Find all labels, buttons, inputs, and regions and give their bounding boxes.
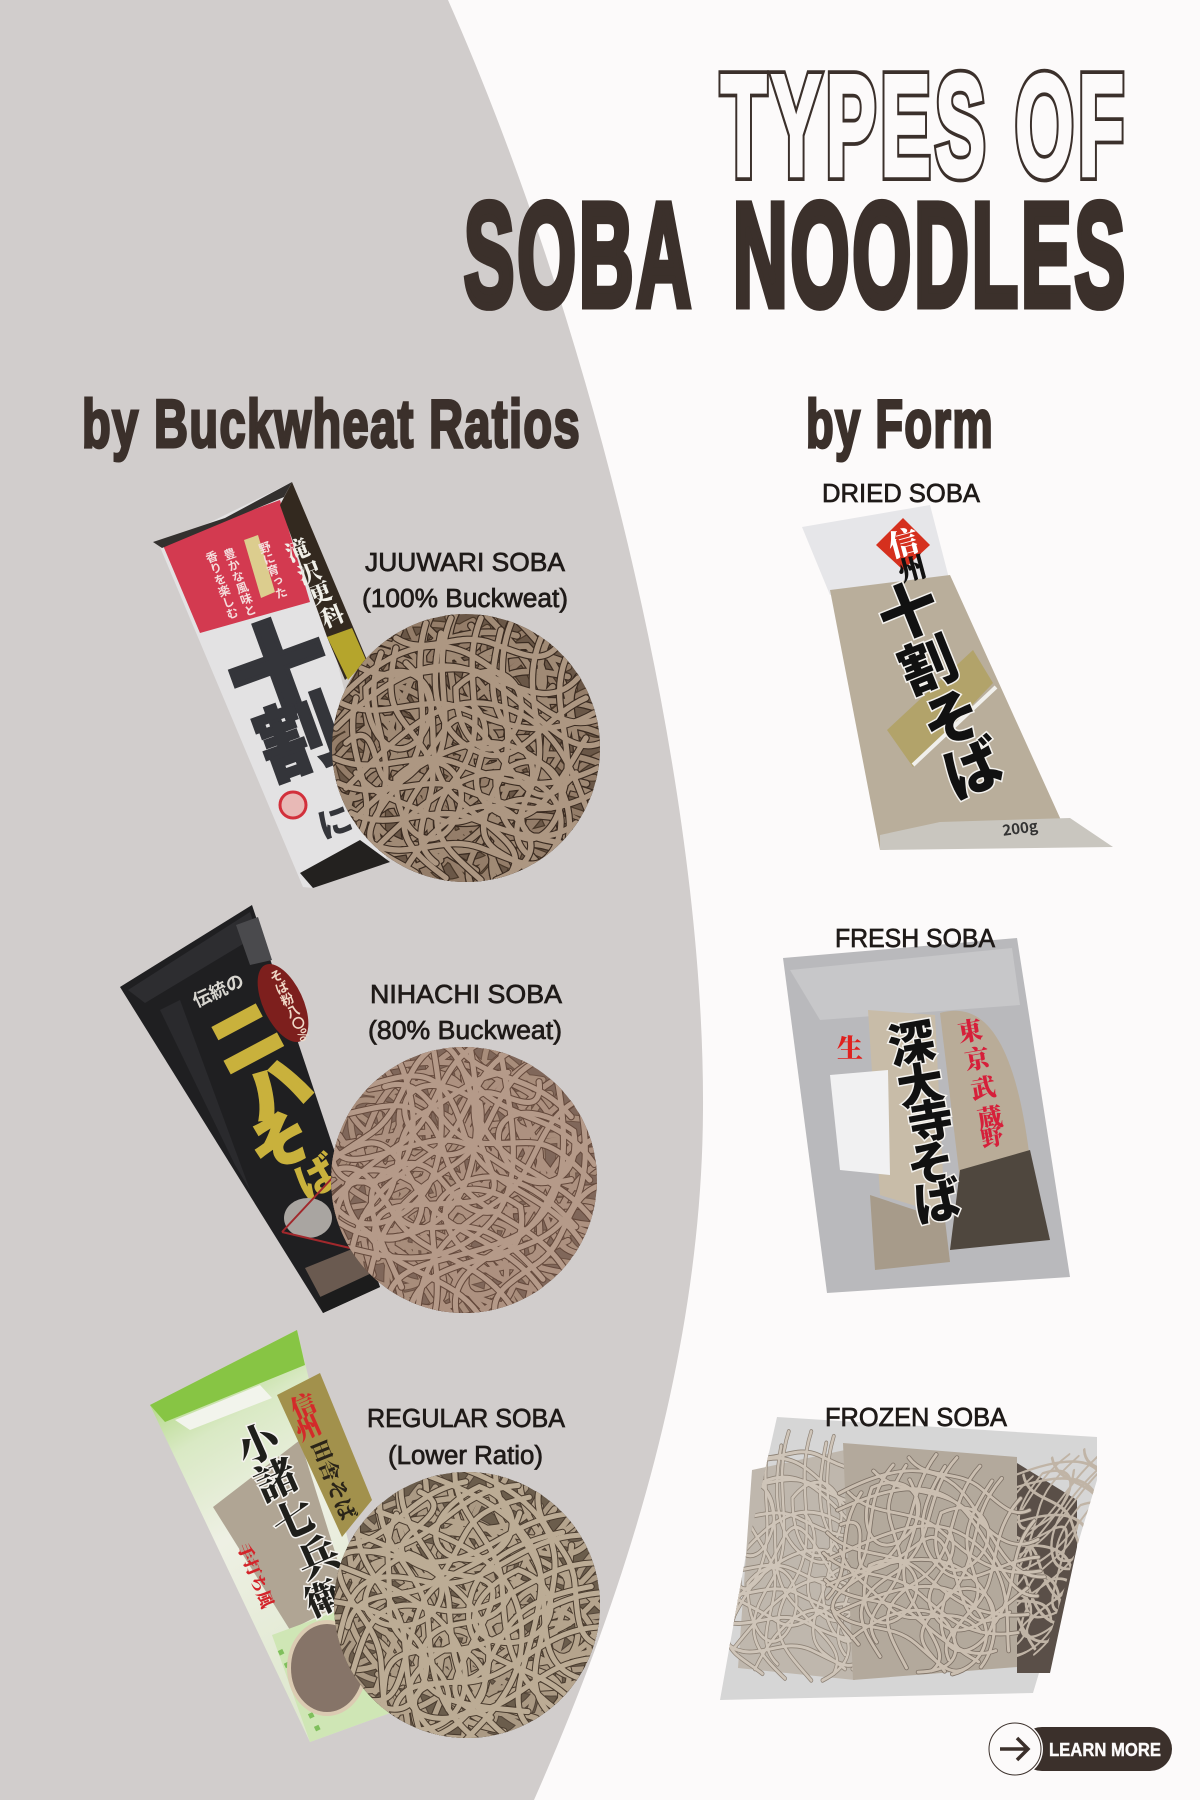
package: juuwari soba: 滝: [280, 529, 314, 569]
title line: soba noodles (solid): SOBA: [464, 174, 694, 338]
package: regular soba: 手打ち風: [233, 1539, 281, 1611]
package: regular soba: 兵: [286, 1518, 350, 1591]
package: dried soba: [802, 505, 1113, 850]
label: nihachi soba: (80% Buckweat): [368, 1017, 562, 1045]
package: fresh soba: 東: [955, 1010, 985, 1050]
package: dried soba: 割: [886, 614, 968, 710]
package: juuwari soba: 豊かな風味と: [219, 544, 260, 619]
package: regular soba: 州: [289, 1405, 327, 1449]
package: nihachi soba: そば粉八〇%: [265, 966, 315, 1045]
package: juuwari soba: 香りを楽しむ: [201, 547, 242, 622]
package: regular soba: 信: [284, 1383, 322, 1427]
label: regular soba: (Lower Ratio): [388, 1442, 543, 1470]
package: nihachi soba: 伝統の: [188, 967, 248, 1013]
package: regular soba: 衛: [295, 1566, 349, 1628]
package: frozen soba: [720, 1417, 1097, 1700]
package: regular soba: 諸: [244, 1442, 306, 1514]
package: fresh soba: 生: [837, 1028, 863, 1066]
package: juuwari soba: [153, 482, 390, 888]
package: juuwari soba: 更: [303, 572, 337, 612]
label: frozen soba: FROZEN SOBA: [825, 1404, 1007, 1432]
button: learn more: LEARN MORE: [1049, 1740, 1161, 1760]
package: fresh soba: 寺: [902, 1082, 958, 1154]
package: dried soba: 200g: [1001, 815, 1039, 841]
package: juuwari soba: 科: [315, 595, 349, 635]
package: fresh soba: 深: [882, 1002, 940, 1078]
package: dried soba: 州: [893, 545, 931, 591]
package: regular soba: [150, 1330, 390, 1742]
noodle circle: juuwari: [332, 614, 600, 882]
package: fresh soba: 蔵: [975, 1097, 1005, 1137]
package: juuwari soba: 沢: [292, 552, 326, 592]
noodle circle: regular: [334, 1472, 600, 1738]
package: nihachi soba: そ: [231, 1086, 325, 1190]
package: juuwari soba: 野に育った: [255, 538, 291, 601]
icon: arrow in circle: [987, 1721, 1043, 1777]
title: [464, 44, 1128, 338]
package: fresh soba: そ: [901, 1122, 959, 1198]
package: dried soba: 信: [883, 516, 923, 566]
package: regular soba: 田舎そば: [304, 1435, 364, 1525]
package: dried soba: ば: [929, 715, 1015, 815]
package: regular soba: 小: [226, 1404, 293, 1478]
package: nihachi soba: ば: [283, 1138, 349, 1212]
label: regular soba: [367, 1405, 565, 1470]
package: regular soba: 七: [262, 1482, 324, 1554]
package: fresh soba: 武: [968, 1067, 998, 1107]
label: regular soba: REGULAR SOBA: [367, 1405, 565, 1433]
label: juuwari soba: (100% Buckweat): [362, 585, 568, 613]
package: fresh soba: 大: [891, 1044, 949, 1120]
package: juuwari soba: 割: [238, 662, 356, 802]
package: fresh soba: [783, 938, 1070, 1293]
heading: by Buckwheat Ratios: by Buckwheat Ratios: [82, 386, 581, 462]
label: nihachi soba: NIHACHI SOBA: [370, 981, 562, 1009]
label: nihachi soba: [368, 981, 562, 1045]
package: fresh soba: 京: [962, 1038, 993, 1078]
package: nihachi soba: [120, 905, 380, 1313]
package: fresh soba: 野: [978, 1120, 1006, 1154]
package: fresh soba: ば: [908, 1160, 966, 1236]
grey curved background panel: [0, 0, 703, 1800]
label: fresh soba: FRESH SOBA: [835, 925, 995, 953]
package: nihachi soba: ハ: [226, 1031, 324, 1139]
button: learn more: [987, 1721, 1172, 1777]
package: juuwari soba: 十: [204, 577, 348, 747]
heading: by Form: by Form: [806, 386, 994, 462]
package: juuwari soba: に: [310, 791, 358, 849]
title line: soba noodles (solid): [464, 174, 1128, 338]
noodle circle: nihachi: [331, 1047, 597, 1313]
label: dried soba: DRIED SOBA: [822, 480, 980, 508]
package: nihachi soba: 二: [194, 979, 292, 1087]
label: juuwari soba: [362, 549, 568, 613]
package: dried soba: 十: [863, 556, 951, 660]
package: dried soba: そ: [907, 665, 993, 765]
label: juuwari soba: JUUWARI SOBA: [365, 549, 565, 577]
